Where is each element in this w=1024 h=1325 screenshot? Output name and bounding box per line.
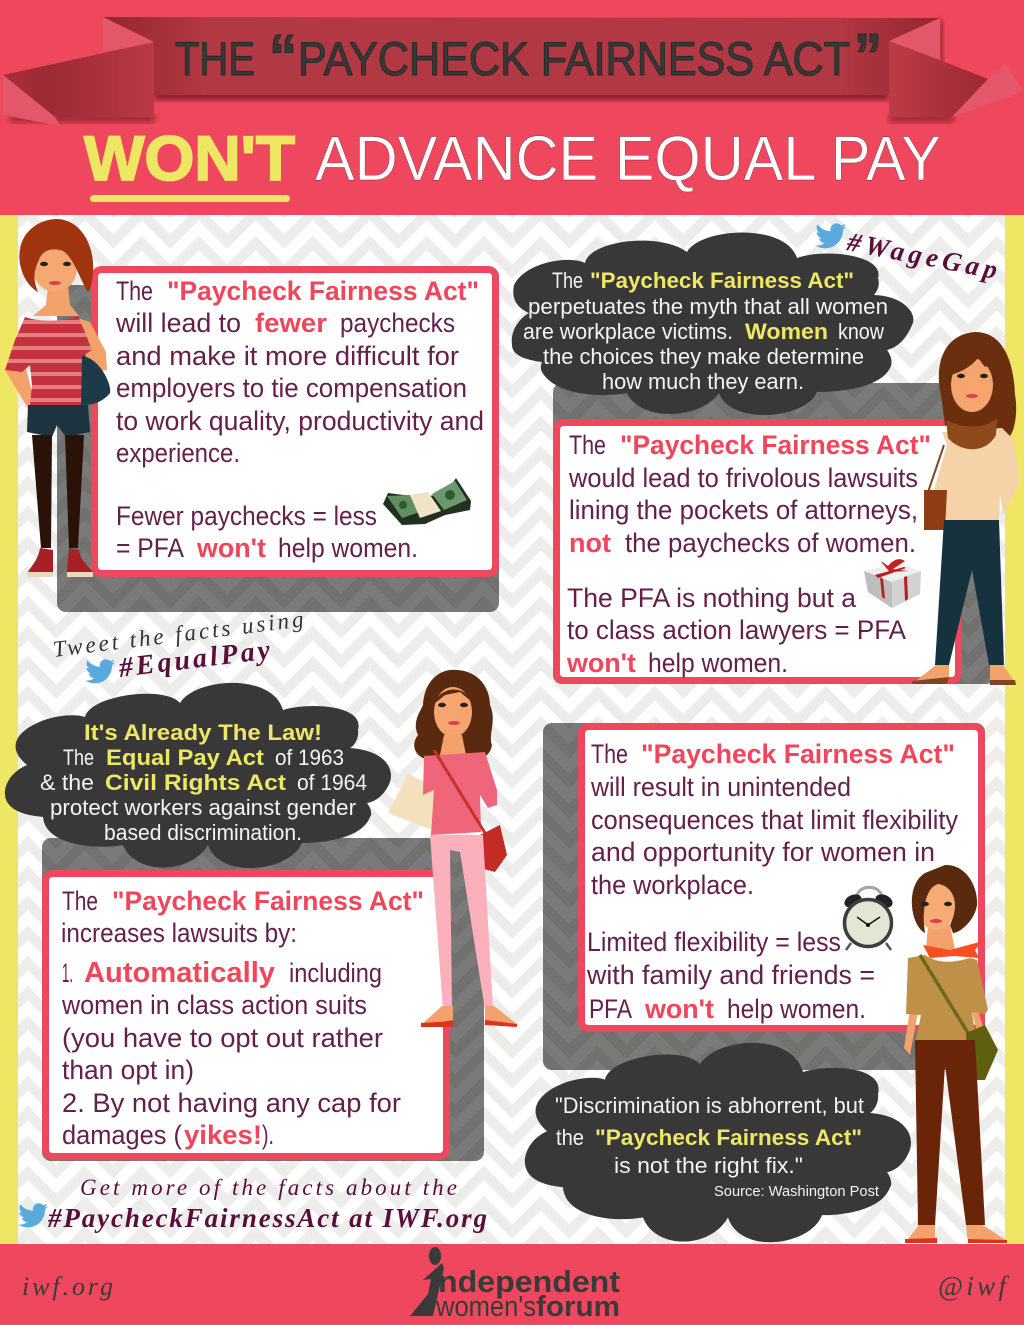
header band <box>0 0 1024 215</box>
title: the paycheck fairness act: PAYCHECK FAIRNESS ACT <box>298 32 850 85</box>
text: increases lawsuits body: 1. <box>62 958 73 988</box>
text: myth callout: "Paycheck Fairness Act" <box>590 268 854 293</box>
text: frivolous lawsuits body: "Paycheck Fairness Act" <box>620 430 931 460</box>
text: already the law callout <box>40 720 367 845</box>
text: washington post quote: "Discrimination is abhorrent, but <box>555 1093 864 1118</box>
subtitle: won't advance equal pay: WON'T <box>84 124 295 194</box>
text: fewer paychecks body: paychecks <box>340 308 455 338</box>
text: increases lawsuits body: "Paycheck Fairness Act" <box>112 886 424 916</box>
text: unintended consequences body: won't <box>644 994 714 1024</box>
title: the paycheck fairness act: THE <box>175 32 255 85</box>
character: woman with cream sweater <box>912 332 1020 685</box>
logo: independent women's forum: ndependent <box>438 1264 620 1299</box>
text: increases lawsuits body: than opt in) <box>62 1055 194 1085</box>
text: already the law callout: & the <box>40 770 94 795</box>
character: woman with tan top <box>904 865 1007 1243</box>
footer band <box>0 1244 1024 1325</box>
logo: independent women's forum <box>410 1247 620 1323</box>
text: fewer paychecks body: fewer <box>255 308 327 338</box>
text: increases lawsuits body: The <box>62 886 98 916</box>
text: already the law callout: of 1963 <box>275 745 344 770</box>
text: fewer paychecks body: to work quality, productivity and <box>116 406 484 436</box>
text: myth callout: perpetuates the myth that all women <box>528 294 888 319</box>
text: frivolous lawsuits body: would lead to frivolous lawsuits <box>568 463 918 493</box>
text: frivolous lawsuits body: not <box>569 528 611 558</box>
left yellow side stripe <box>0 215 18 1245</box>
text: myth callout <box>523 268 888 394</box>
title: the paycheck fairness act: ” <box>854 22 882 91</box>
text: already the law callout: of 1964 <box>297 770 367 795</box>
text: myth callout: The <box>552 268 583 293</box>
footer handle: @iwf: @iwf <box>938 1271 1009 1301</box>
text: unintended consequences body <box>586 739 958 1024</box>
text: myth callout: the choices they make determine <box>543 344 864 369</box>
cloud: myth callout <box>512 232 913 415</box>
text: washington post quote: the <box>556 1125 584 1150</box>
panel: increases lawsuits <box>42 838 484 1161</box>
text: frivolous lawsuits body: help women. <box>648 648 788 678</box>
icon: twitter bird <box>18 1203 48 1227</box>
text: frivolous lawsuits body: The PFA is nothing but a <box>567 583 857 613</box>
cloud: washington post quote <box>525 1043 911 1242</box>
panel: fewer paychecks <box>57 270 499 612</box>
text: washington post quote <box>555 1093 880 1200</box>
text: increases lawsuits body: damages ( <box>62 1120 182 1150</box>
hashtag: paycheck fairness act at iwf.org <box>18 1175 487 1233</box>
text: increases lawsuits body: 2. By not having any cap for <box>62 1088 401 1118</box>
text: fewer paychecks body: help women. <box>278 533 418 563</box>
cloud: already the law callout <box>5 683 391 868</box>
text: already the law callout: The <box>63 745 94 770</box>
text: fewer paychecks body: employers to tie compensation <box>116 373 467 403</box>
text: frivolous lawsuits body: to class action lawyers = PFA <box>567 615 906 645</box>
title: the paycheck fairness act: “ <box>269 23 297 92</box>
text: washington post quote: is not the right fix." <box>614 1153 803 1178</box>
text: frivolous lawsuits body <box>566 430 931 678</box>
hashtag: paycheck fairness act at iwf.org: #PaycheckFairnessAct at IWF.org <box>47 1203 487 1233</box>
text: already the law callout: Civil Rights Act <box>105 770 287 795</box>
ribbon banner <box>3 17 1023 126</box>
logo: independent women's forum: forum <box>536 1291 620 1323</box>
text: increases lawsuits body: (you have to opt out rather <box>62 1023 383 1053</box>
text: unintended consequences body: will result in unintended <box>590 772 851 802</box>
text: fewer paychecks body: The <box>116 276 153 306</box>
text: myth callout: are workplace victims. <box>523 319 733 344</box>
text: unintended consequences body: the workplace. <box>591 870 754 900</box>
text: frivolous lawsuits body: won't <box>566 648 636 678</box>
text: myth callout: Women <box>745 319 828 344</box>
text: increases lawsuits body <box>61 886 424 1150</box>
text: already the law callout: It's Already The Law! <box>84 720 322 745</box>
icon: money stack <box>383 478 471 525</box>
character: woman with striped top <box>5 219 110 577</box>
text: fewer paychecks body <box>115 276 484 563</box>
text: unintended consequences body: consequences that limit flexibility <box>591 805 958 835</box>
panel: frivolous lawsuits <box>553 383 995 684</box>
text: increases lawsuits body: ). <box>262 1120 274 1150</box>
character: woman with pink top <box>388 670 517 1027</box>
panel: unintended consequences <box>543 723 985 1070</box>
text: unintended consequences body: The <box>591 739 628 769</box>
text: unintended consequences body: and opportunity for women in <box>591 837 935 867</box>
footer link: iwf.org: iwf.org <box>22 1272 113 1301</box>
hashtag: paycheck fairness act at iwf.org: Get more of the facts about the <box>80 1175 457 1200</box>
text: unintended consequences body: with family and friends = <box>586 960 875 990</box>
text: frivolous lawsuits body: the paychecks of women. <box>625 528 916 558</box>
text: increases lawsuits body: Automatically <box>84 957 275 989</box>
text: myth callout: know <box>838 319 884 344</box>
icon: twitter bird <box>85 659 115 683</box>
text: already the law callout: based discrimination. <box>104 820 302 845</box>
chevron background <box>0 215 1024 1245</box>
text: fewer paychecks body: "Paycheck Fairness Act" <box>167 276 479 306</box>
text: increases lawsuits body: women in class action suits <box>61 990 367 1020</box>
title: the paycheck fairness act <box>175 22 882 92</box>
hashtag: tweet the facts: #EqualPay <box>116 635 272 684</box>
text: increases lawsuits body: yikes! <box>184 1120 262 1150</box>
text: already the law callout: protect workers against gender <box>50 795 356 820</box>
right yellow side stripe <box>1005 215 1024 1245</box>
text: myth callout: how much they earn. <box>602 369 804 394</box>
text: unintended consequences body: "Paycheck Fairness Act" <box>641 739 955 769</box>
text: unintended consequences body: PFA <box>589 994 632 1024</box>
subtitle: won't advance equal pay: ADVANCE EQUAL PAY <box>315 124 941 194</box>
text: fewer paychecks body: Fewer paychecks = less <box>116 501 377 531</box>
text: washington post quote: "Paycheck Fairness Act" <box>595 1125 862 1150</box>
text: fewer paychecks body: experience. <box>116 438 240 468</box>
text: washington post quote: Source: Washington Post <box>714 1183 880 1200</box>
text: unintended consequences body: help women. <box>727 994 866 1024</box>
icon: alarm clock <box>842 887 895 950</box>
text: fewer paychecks body: will lead to <box>115 308 241 338</box>
logo: independent women's forum: women's <box>435 1291 536 1323</box>
text: increases lawsuits body: including <box>289 958 382 988</box>
hashtag: wage gap: #WageGap <box>844 226 1000 285</box>
text: frivolous lawsuits body: lining the pockets of attorneys, <box>569 495 918 525</box>
icon: twitter bird <box>815 223 846 248</box>
hashtag: tweet the facts: Tweet the facts using <box>52 606 305 662</box>
text: frivolous lawsuits body: The <box>569 430 606 460</box>
text: unintended consequences body: Limited flexibility = less <box>587 927 841 957</box>
text: fewer paychecks body: won't <box>196 533 266 563</box>
text: increases lawsuits body: increases lawsuits by: <box>61 918 297 948</box>
underline <box>90 195 290 202</box>
text: already the law callout: Equal Pay Act <box>106 745 265 770</box>
text: fewer paychecks body: = PFA <box>116 533 184 563</box>
icon: gift box <box>864 559 921 608</box>
text: fewer paychecks body: and make it more difficult for <box>116 341 459 371</box>
